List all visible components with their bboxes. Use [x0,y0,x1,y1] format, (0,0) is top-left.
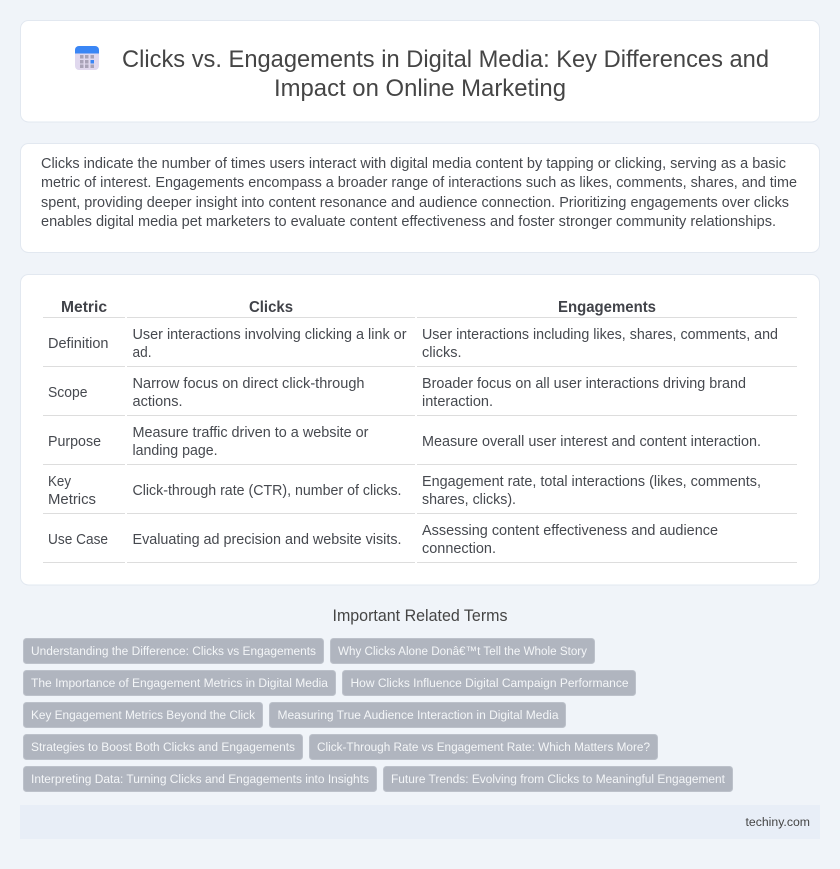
tag [24,670,336,696]
related terms tags [24,638,732,792]
tag: Measuring True Audience Interaction in Digital Media [278,708,559,722]
tag [342,670,636,696]
table row: definition: User interactions including likes, shares, comments, and [422,327,778,343]
table row: purpose: Measure overall user interest and content interaction. [422,434,761,450]
intro text [41,156,797,230]
table row: key metrics: Engagement rate, total interactions (likes, comments, [422,474,761,490]
table row: definition: User interactions involving clicking a link or [132,327,407,343]
intro text: spent, providing deeper insight into content resonance and audience connection. Prioritizing engagements over clicks [41,195,789,211]
icon: calendar [75,46,99,70]
table row: purpose [48,425,761,459]
table row: definition: Definition [48,336,108,352]
table row: scope: interaction. [422,394,493,410]
panel: intro paragraph [20,144,820,252]
table row: key metrics: Click-through rate (CTR), number of clicks. [132,483,402,499]
title: Clicks vs. Engagements in Digital Media: Key Differences and [122,46,769,73]
tag: Strategies to Boost Both Clicks and Engagements [31,740,295,754]
table header row: Engagements [558,299,656,316]
tag [270,702,566,728]
table row: use case: Use Case [48,532,108,548]
panel: comparison table [20,274,820,585]
tag: Interpreting Data: Turning Clicks and Engagements into Insights [31,772,369,786]
heading: important related terms: Important Related Terms [332,607,508,625]
footer [20,805,820,839]
table header row: Clicks [249,299,293,316]
table row: purpose: Purpose [48,434,101,450]
intro text: enables digital media pet marketers to evaluate content effectiveness and foster stronger community relationships. [41,214,776,230]
table row: purpose: landing page. [132,443,218,459]
footer source: techiny.com [746,815,810,829]
intro text: Clicks indicate the number of times users interact with digital media content by tapping or clicking, serving as a basic [41,156,786,172]
tag [24,702,262,728]
panel: title header [20,20,820,122]
tag: Why Clicks Alone Donâ€™t Tell the Whole Story [338,644,588,658]
tag [24,766,376,792]
tag [24,734,302,760]
table row: scope: Broader focus on all user interactions driving brand [422,376,746,392]
table row: use case: connection. [422,541,496,557]
table row: scope [48,376,746,410]
tag: Future Trends: Evolving from Clicks to Meaningful Engagement [391,772,726,786]
table row: key metrics: Key [48,474,72,490]
table row: definition: ad. [132,345,152,361]
title: Impact on Online Marketing [274,75,566,102]
tag: The Importance of Engagement Metrics in Digital Media [31,676,328,690]
table row: scope: Scope [48,385,88,401]
table header row: Metric [61,299,107,316]
table row: use case: Evaluating ad precision and website visits. [132,532,402,548]
tag [24,638,324,664]
tag [384,766,732,792]
table row: definition: clicks. [422,345,462,361]
table row: key metrics [48,474,761,508]
tag: Click-Through Rate vs Engagement Rate: Which Matters More? [317,740,650,754]
tag [330,638,594,664]
table header row [61,299,656,316]
table row: definition [48,327,778,361]
tag [310,734,658,760]
table row: key metrics: Metrics [48,492,96,508]
tag: Key Engagement Metrics Beyond the Click [31,708,256,722]
table row: scope: actions. [132,394,182,410]
tag: Understanding the Difference: Clicks vs Engagements [31,644,316,658]
table row: scope: Narrow focus on direct click-through [132,376,364,392]
table row: use case [48,523,718,557]
tag: How Clicks Influence Digital Campaign Performance [350,676,629,690]
table row: key metrics: shares, clicks). [422,492,516,508]
table row: use case: Assessing content effectiveness and audience [422,523,718,539]
table row: purpose: Measure traffic driven to a website or [132,425,369,441]
title [122,46,769,102]
intro text: metric of interest. Engagements encompass a broader range of interactions such as likes, comments, shares, and time [41,175,797,191]
